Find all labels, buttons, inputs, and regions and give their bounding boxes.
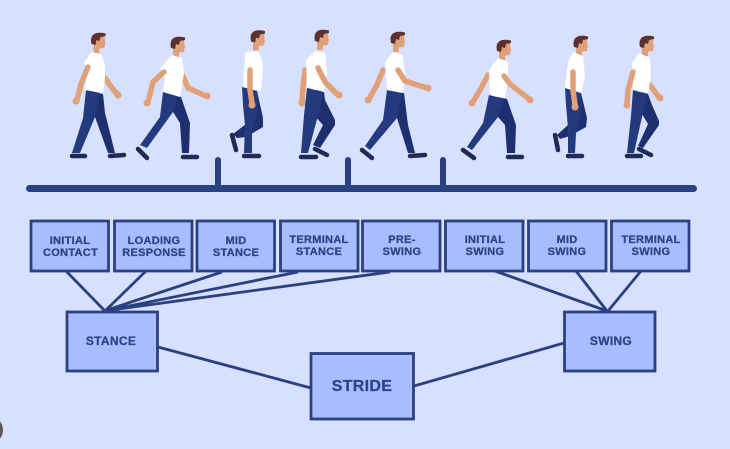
figure 4: terminal stance: [298, 30, 342, 157]
box: terminal stance: STANCE: [296, 246, 342, 258]
box: swing: [564, 312, 655, 371]
box: mid stance: MID: [225, 235, 247, 247]
box: loading response: LOADING: [128, 235, 180, 247]
box: terminal swing: SWING: [632, 246, 670, 258]
figure 8: terminal swing: [624, 36, 664, 156]
box: loading response: RESPONSE: [122, 247, 186, 259]
box: initial contact: INITIAL: [50, 235, 90, 247]
box: initial swing: SWING: [466, 246, 504, 258]
box: mid swing: [528, 221, 606, 271]
connector lines: [66, 271, 641, 388]
box: mid swing: MID: [556, 234, 578, 246]
box: terminal swing: TERMINAL: [621, 234, 681, 246]
box: stance: STANCE: [86, 334, 136, 348]
box: stride: STRIDE: [332, 378, 392, 395]
box: mid stance: [197, 221, 274, 271]
box: loading response: [114, 221, 192, 271]
figure 1: initial contact: [72, 33, 124, 156]
box: pre-swing: PRE-: [388, 234, 416, 246]
box: initial swing: INITIAL: [465, 234, 505, 246]
box: pre-swing: [362, 221, 440, 271]
box: terminal stance: [280, 221, 358, 271]
box: pre-swing: SWING: [383, 246, 421, 258]
box: initial swing: [446, 221, 523, 271]
box: terminal stance: TERMINAL: [289, 234, 349, 246]
timeline bar with ticks: [26, 157, 697, 192]
box: initial contact: CONTACT: [43, 247, 98, 259]
box: stance: [67, 312, 158, 371]
figure 5: pre-swing: [362, 32, 432, 158]
corner badge: [0, 416, 3, 444]
box: stride: [311, 354, 414, 419]
figure 3: mid stance: [232, 30, 266, 156]
figure 6: initial swing: [463, 40, 534, 158]
box: swing: SWING: [590, 334, 632, 348]
box: initial contact: [31, 221, 108, 271]
figure 2: loading response: [138, 37, 210, 158]
box: mid stance: STANCE: [213, 247, 259, 259]
figure 7: mid swing: [555, 36, 588, 156]
box: terminal swing: [612, 221, 689, 271]
box: mid swing: SWING: [548, 246, 586, 258]
